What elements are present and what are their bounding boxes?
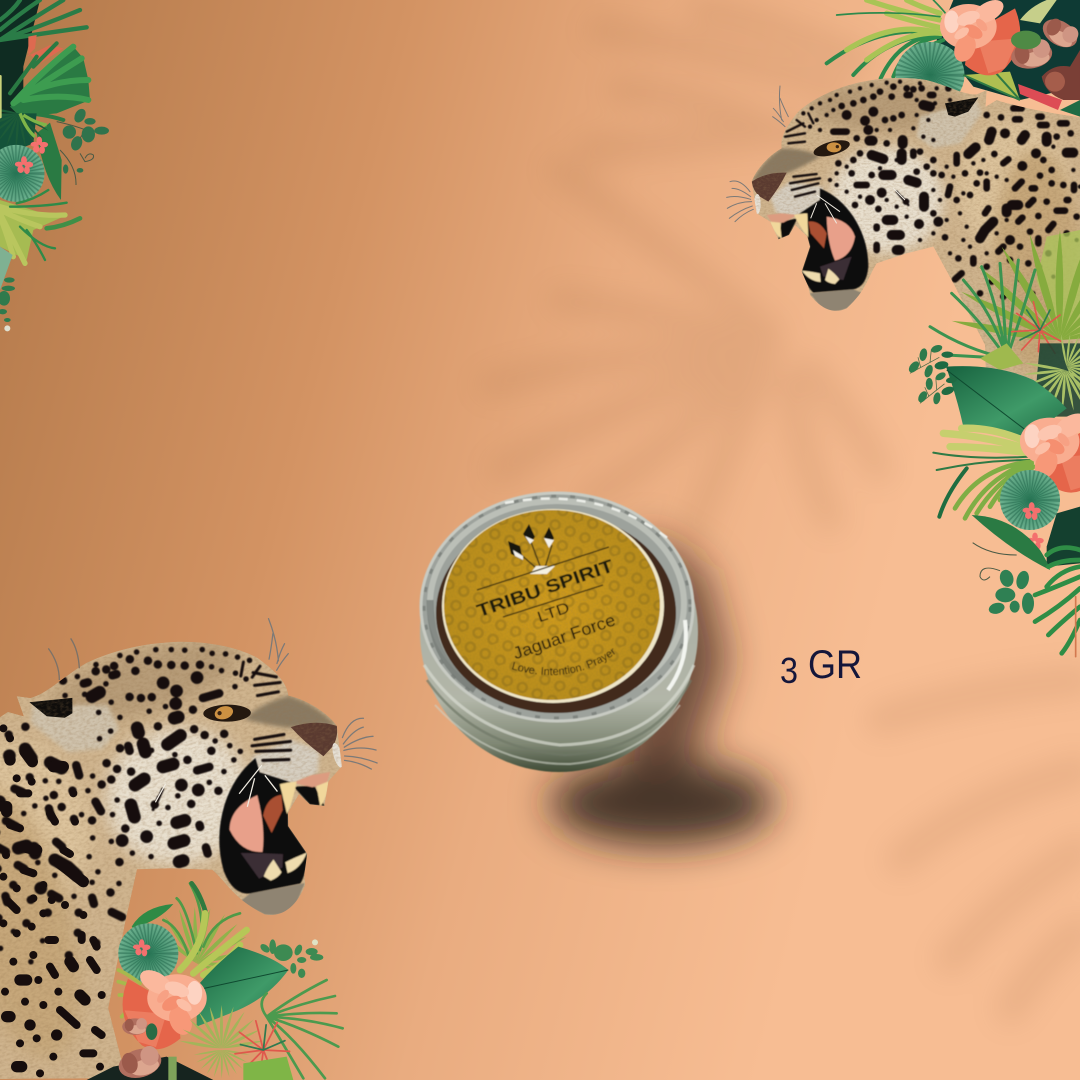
palm leaf shadows [490, 10, 1080, 1010]
gold label: Love. Intention. Prayer [512, 648, 616, 676]
gold label [441, 508, 665, 704]
salmon flower [1020, 408, 1080, 493]
sprig [259, 939, 323, 978]
jaguar: bottom left [0, 590, 445, 1080]
salmon flower [123, 965, 207, 1049]
glass body [420, 492, 698, 772]
pink blossoms [1022, 502, 1044, 550]
jar cast shadow [550, 530, 774, 845]
glass rim [421, 493, 693, 721]
fan leaf [0, 145, 44, 202]
pink blossom [133, 939, 150, 956]
fan leaf [1000, 470, 1060, 530]
thin palm [262, 980, 343, 1078]
jaguar: top right [727, 78, 1080, 402]
green spikes [10, 43, 90, 120]
label text: TRIBU SPIRIT [474, 556, 616, 621]
foliage: bottom-left cluster behind jaguar [147, 886, 274, 993]
big leaf [197, 947, 288, 1027]
dark frond [1047, 507, 1080, 567]
thin palm [930, 260, 1035, 358]
big leaf [946, 366, 1067, 437]
red star [225, 1008, 300, 1080]
long leaf [972, 515, 1050, 570]
gold label: LTD [535, 599, 572, 626]
foliage: right cluster [907, 230, 1080, 657]
drooping pale fan [1012, 324, 1080, 423]
weight label [780, 643, 862, 691]
curls and sprig [973, 543, 1017, 580]
lower leaves [1035, 548, 1080, 657]
small pale fan [179, 1005, 265, 1078]
palm frond [933, 428, 1033, 518]
red star [1012, 302, 1062, 353]
sprig [907, 344, 953, 378]
palm frond [163, 883, 247, 975]
feather logo [508, 524, 555, 574]
foliage: top-right cluster behind jaguar [827, 0, 1080, 117]
pink blossoms [15, 137, 48, 174]
left palm bits [118, 970, 140, 1017]
weight label: 3 [780, 650, 798, 691]
sprig [57, 107, 109, 185]
dark palm [0, 0, 87, 40]
foliage: top-left cluster [0, 0, 109, 331]
ear whiskers [48, 638, 79, 680]
long leaf [37, 123, 62, 200]
jar [419, 491, 698, 773]
lower leaves [0, 75, 15, 331]
palm frond [827, 0, 950, 78]
body spots [3, 728, 102, 1073]
foliage: bottom-left cluster [87, 883, 343, 1080]
dark powder ring [436, 513, 676, 713]
dark fan [0, 100, 51, 158]
salmon flower [940, 0, 1020, 75]
rose flowers [1009, 0, 1080, 100]
top leaf [132, 904, 173, 928]
rose flowers [87, 1018, 213, 1080]
fan leaf [895, 42, 964, 108]
gold label: Jaguar Force [511, 610, 618, 663]
fan leaf [118, 923, 178, 983]
weight label: GR [808, 643, 862, 687]
yellow frond [0, 190, 80, 263]
dark backing [1033, 343, 1080, 417]
yellow palm [951, 230, 1080, 344]
foliage: red bloom over jaguar [1018, 84, 1062, 110]
red blooms [27, 35, 75, 87]
